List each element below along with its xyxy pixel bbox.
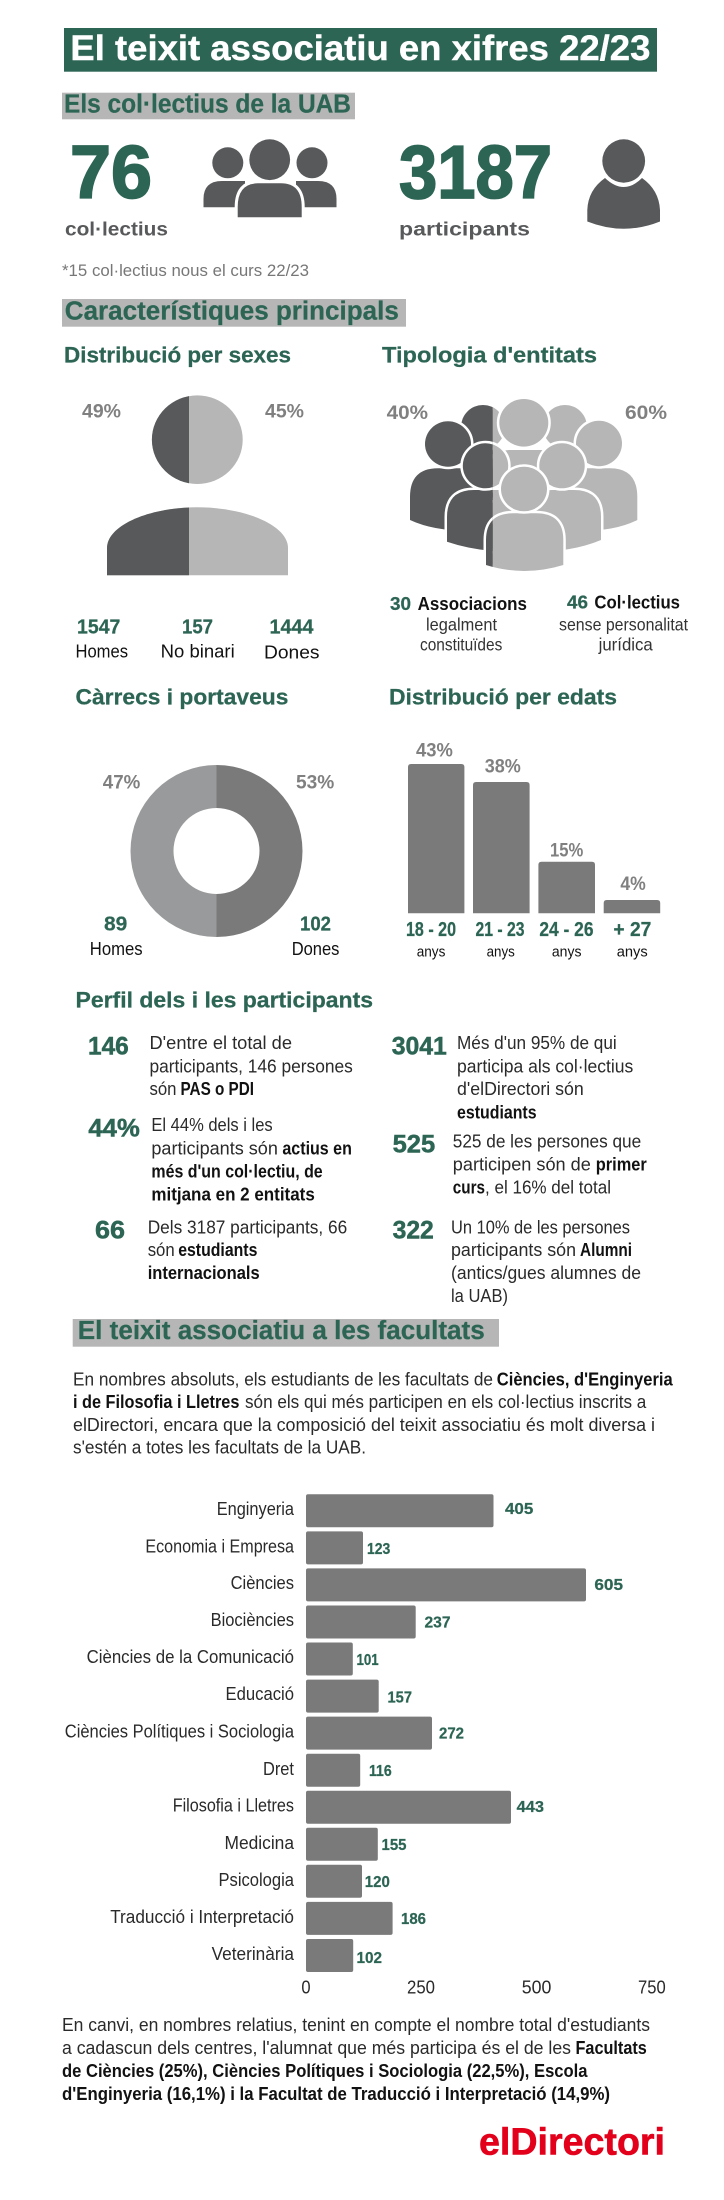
- stat: 66: estudiants: [178, 1240, 257, 1260]
- stat: 44%: 44%: [88, 1115, 140, 1143]
- panel: perfil dels i les participants: [76, 988, 647, 1306]
- caption: associacions: 30: [390, 594, 411, 614]
- counts: [76, 616, 320, 662]
- panel: càrrecs i portaveus: [76, 684, 339, 959]
- x axis ticks: 500: [522, 1977, 551, 1997]
- x axis ticks: 0: [301, 1977, 311, 1997]
- stat: 146: D'entre el total de: [150, 1033, 292, 1053]
- legend men: [90, 914, 143, 959]
- category labels: Ciències de la Comunicació: [87, 1647, 294, 1667]
- bar chart: + 27: [613, 919, 651, 941]
- counts: Dones: [264, 642, 320, 662]
- stat: 3041: d'elDirectori són: [457, 1079, 584, 1099]
- section heading: Els col·lectius de la UAB: Els col·lectius de la UAB: [64, 91, 351, 119]
- closing paragraph: d'Enginyeria (16,1%) i la Facultat de Traducció i Interpretació (14,9%): [62, 2084, 610, 2104]
- value labels: 155: [382, 1837, 407, 1854]
- legend women: [292, 914, 339, 959]
- category labels: Dret: [263, 1759, 294, 1779]
- percentage women: 53%: [296, 772, 334, 794]
- bar chart: 15%: [550, 840, 583, 862]
- title banner: El teixit associatiu en xifres 22/23: [70, 29, 650, 68]
- category labels: Educació: [226, 1684, 294, 1704]
- section heading: El teixit associatiu a les facultats: El teixit associatiu a les facultats: [78, 1317, 485, 1345]
- stat: 322: Alumni: [580, 1240, 632, 1260]
- stat: 3041: estudiants: [457, 1102, 537, 1122]
- value labels: 116: [369, 1763, 392, 1780]
- stat: 66: internacionals: [148, 1263, 260, 1283]
- value labels: 605: [594, 1577, 623, 1594]
- value labels: 272: [439, 1725, 464, 1742]
- category labels: Psicologia: [218, 1870, 295, 1890]
- footnote: *15 col·lectius nous el curs 22/23: [62, 262, 309, 280]
- category labels: Economia i Empresa: [145, 1536, 295, 1556]
- section heading: Característiques principals: Característiques principals: [65, 297, 399, 325]
- category labels: Filosofia i Lletres: [173, 1796, 294, 1816]
- stat: 44%: més d'un col·lectiu, de: [151, 1161, 323, 1181]
- bar chart: participants per facultat: [65, 1494, 666, 1997]
- stat: 66: 66: [95, 1216, 125, 1244]
- value labels: 101: [356, 1652, 379, 1669]
- closing paragraph: Facultats: [576, 2038, 647, 2058]
- stat: 146: PAS o PDI: [180, 1079, 254, 1099]
- stat: 322: la UAB): [451, 1286, 508, 1306]
- percentage women: 45%: [265, 401, 304, 423]
- stat: 525: , el 16% del total: [485, 1177, 611, 1197]
- stat: 322: participants són: [451, 1240, 576, 1260]
- panel: distribució per sexes: [64, 343, 320, 662]
- stat: 66: són: [148, 1240, 175, 1260]
- bar chart: [406, 740, 660, 961]
- category labels: Traducció i Interpretació: [110, 1907, 294, 1927]
- icon: crowd split 40/60: [410, 399, 637, 571]
- caption: col·lectius: jurídica: [598, 635, 653, 655]
- category labels: Veterinària: [212, 1944, 295, 1964]
- intro paragraph: [73, 1369, 674, 1458]
- stat: 44%: [88, 1115, 352, 1205]
- legend men: Homes: [90, 939, 143, 959]
- heading: Perfil dels i les participants: [76, 988, 373, 1013]
- value labels: 443: [517, 1799, 544, 1816]
- stat: 3187 participants: participants: [399, 219, 530, 240]
- bar chart: 21 - 23: [476, 919, 524, 941]
- intro paragraph: i de Filosofia i Lletres: [73, 1392, 239, 1412]
- caption: associacions: legalment: [426, 615, 497, 635]
- x axis ticks: 250: [407, 1977, 435, 1997]
- caption: col·lectius: [559, 593, 688, 655]
- stat: 525: 525: [393, 1130, 435, 1158]
- category labels: Ciències Polítiques i Sociologia: [65, 1722, 295, 1742]
- logo: elDirectori: elDirectori: [479, 2121, 665, 2163]
- counts: 1547: [77, 616, 120, 638]
- heading: Tipologia d'entitats: [382, 343, 597, 368]
- intro paragraph: són els qui més participen en els col·lectius inscrits a: [245, 1392, 647, 1412]
- stat: 66: [95, 1216, 347, 1283]
- stat: 66: Dels 3187 participants, 66: [148, 1217, 347, 1237]
- percentage collectives: 60%: [625, 402, 667, 424]
- legend men: 89: [104, 914, 127, 936]
- x axis ticks: 750: [638, 1977, 666, 1997]
- caption: col·lectius: sense personalitat: [559, 615, 688, 635]
- stat: 525: [393, 1130, 647, 1197]
- value labels: 237: [424, 1614, 451, 1631]
- stat: 146: són: [150, 1079, 176, 1099]
- bars: [306, 1494, 586, 1972]
- bar chart: anys: [487, 944, 515, 961]
- caption: col·lectius: Col·lectius: [594, 593, 680, 613]
- bar chart: anys: [417, 944, 445, 961]
- stat: 322: Un 10% de les persones: [451, 1217, 630, 1237]
- percentage associations: 40%: [387, 402, 428, 424]
- x axis ticks: [301, 1977, 666, 1997]
- caption: col·lectius: 46: [567, 593, 588, 613]
- stat: 3041: participa als col·lectius: [457, 1056, 633, 1076]
- value labels: 123: [367, 1541, 390, 1558]
- heading: Distribució per sexes: [64, 343, 291, 368]
- percentage men: 47%: [103, 772, 140, 794]
- intro paragraph: En nombres absoluts, els estudiants de les facultats de: [73, 1369, 493, 1389]
- panel: tipologia d'entitats: [382, 343, 688, 655]
- value labels: 120: [365, 1874, 390, 1891]
- stat: 76 collectius: [65, 130, 168, 240]
- donut chart: [130, 765, 302, 937]
- stat: 525: primer: [596, 1155, 647, 1175]
- heading: Càrrecs i portaveus: [76, 684, 288, 709]
- stat: 3041: Més d'un 95% de qui: [457, 1033, 617, 1053]
- legend women: Dones: [292, 939, 339, 959]
- caption: associacions: Associacions: [418, 594, 527, 614]
- category labels: Medicina: [224, 1833, 295, 1853]
- category labels: Ciències: [231, 1573, 294, 1593]
- counts: No binari: [161, 641, 235, 661]
- legend women: 102: [300, 914, 331, 936]
- intro paragraph: Ciències, d'Enginyeria: [497, 1369, 674, 1389]
- category labels: Biociències: [211, 1610, 294, 1630]
- stat: 44%: actius en: [282, 1138, 352, 1158]
- counts: Homes: [76, 641, 128, 661]
- value labels: 157: [388, 1689, 412, 1706]
- value labels: 186: [401, 1911, 426, 1928]
- stat: 3041: 3041: [392, 1032, 447, 1060]
- stat: 44%: El 44% dels i les: [151, 1115, 273, 1135]
- counts: 157: [182, 616, 213, 638]
- panel: distribució per edats: [389, 684, 660, 961]
- stat: 76 collectius: col·lectius: [65, 219, 168, 240]
- stat: 44%: participants són: [151, 1138, 278, 1158]
- caption: associacions: constituïdes: [420, 635, 503, 655]
- value labels: 405: [505, 1501, 533, 1518]
- stat: 525: participen són de: [453, 1155, 591, 1175]
- closing paragraph: de Ciències (25%), Ciències Polítiques i Sociologia (22,5%), Escola: [62, 2061, 588, 2081]
- bar chart: 43%: [416, 740, 453, 762]
- icon: single person: [587, 139, 660, 229]
- icon: group of three people: [204, 139, 336, 217]
- stat: 525: curs: [453, 1177, 485, 1197]
- stat: 146: participants, 146 persones: [150, 1056, 353, 1076]
- stat: 322: (antics/gues alumnes de: [451, 1263, 641, 1283]
- closing paragraph: En canvi, en nombres relatius, tenint en compte el nombre total d'estudiants: [62, 2015, 650, 2035]
- value labels: [356, 1501, 623, 1967]
- counts: 1444: [270, 616, 314, 638]
- stat: 525: 525 de les persones que: [453, 1131, 641, 1151]
- heading: Distribució per edats: [389, 684, 617, 709]
- bar chart: anys: [552, 944, 582, 961]
- bar chart: 4%: [620, 873, 646, 895]
- stat: 76 collectius: 76: [70, 130, 152, 214]
- category labels: Enginyeria: [217, 1499, 295, 1519]
- closing paragraph: [62, 2015, 650, 2104]
- stat: 3041: [392, 1032, 633, 1122]
- category labels: [65, 1499, 295, 1964]
- stat: 322: [393, 1216, 641, 1306]
- bar chart: 24 - 26: [539, 919, 594, 941]
- bar chart: 18 - 20: [406, 919, 456, 941]
- stat: 146: [88, 1032, 353, 1099]
- stat: 44%: mitjana en 2 entitats: [151, 1185, 315, 1205]
- percentage men: 49%: [82, 401, 121, 423]
- bar chart: 38%: [485, 756, 521, 778]
- value labels: 102: [356, 1950, 382, 1967]
- intro paragraph: elDirectori, encara que la composició del teixit associatiu és molt diversa i: [73, 1415, 655, 1435]
- intro paragraph: s'estén a totes les facultats de la UAB.: [73, 1438, 366, 1458]
- stat: 3187 participants: 3187: [399, 130, 552, 214]
- icon: person split by sex: [107, 395, 288, 575]
- caption: associacions: [390, 594, 527, 655]
- stat: 146: 146: [88, 1032, 129, 1060]
- closing paragraph: a cadascun dels centres, l'alumnat que més participa és el de les: [62, 2038, 571, 2058]
- bar chart: anys: [617, 944, 648, 961]
- stat: 322: 322: [393, 1216, 434, 1244]
